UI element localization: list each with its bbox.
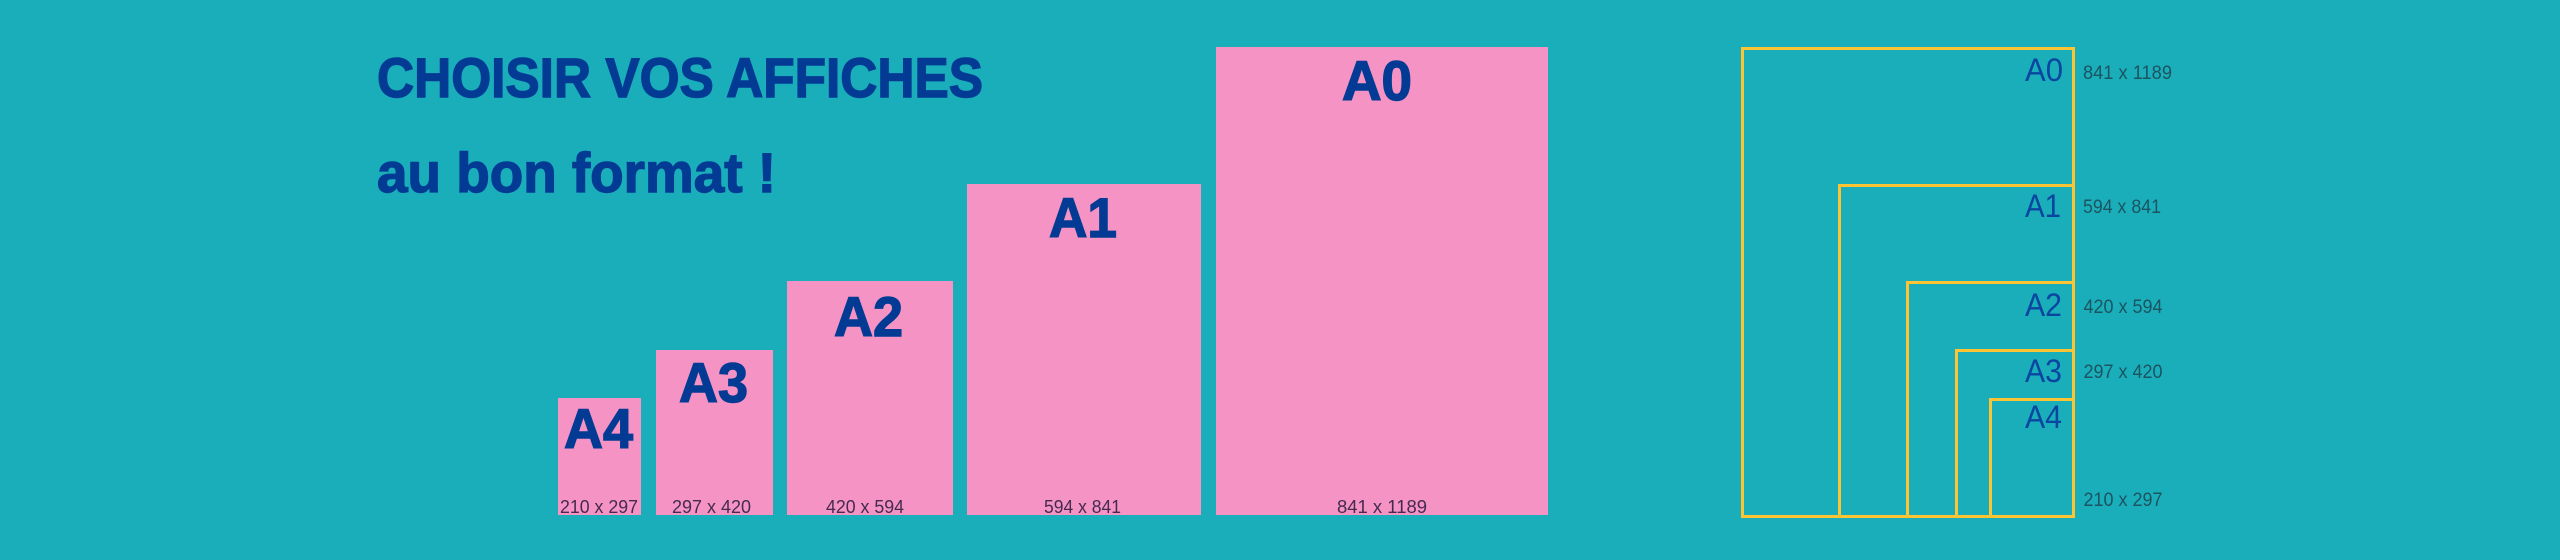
poster A2: [787, 281, 953, 517]
panel: pink poster sizes comparison: [558, 47, 1548, 517]
outline A1: 594 x 841: [2083, 197, 2161, 218]
outline A3: A3: [2025, 353, 2062, 389]
outline A0: [1742, 48, 2172, 516]
poster A0: [1216, 47, 1548, 517]
outline A1: [1840, 186, 2161, 516]
outline A0: 841 x 1189: [2083, 63, 2172, 84]
poster A0: 841 x 1189: [1337, 497, 1427, 517]
outline A1: A1: [2025, 188, 2061, 224]
poster A4: A4: [564, 397, 633, 460]
poster A4: [558, 397, 641, 517]
heading: title: [377, 46, 983, 204]
poster A4: 210 x 297: [560, 497, 638, 517]
poster A3: [656, 350, 773, 517]
poster A0: A0: [1342, 49, 1412, 112]
outline A2: [1908, 282, 2163, 516]
outline A3: 297 x 420: [2084, 362, 2162, 383]
outline A2: A2: [2025, 287, 2062, 323]
poster A3: 297 x 420: [672, 497, 751, 517]
poster A3: A3: [679, 351, 748, 414]
heading line 2: au bon format !: [377, 141, 776, 204]
outline A2: 420 x 594: [2084, 297, 2163, 318]
heading line 1: CHOISIR VOS AFFICHES: [377, 46, 983, 109]
poster A2: A2: [834, 285, 903, 348]
outline A3: [1956, 350, 2162, 516]
panel: nested format outlines: [1742, 48, 2172, 516]
outline A4: [1990, 399, 2162, 516]
poster A1: A1: [1049, 186, 1117, 249]
poster A2: 420 x 594: [826, 497, 904, 517]
outline A0: A0: [2025, 52, 2063, 88]
poster A1: 594 x 841: [1044, 497, 1121, 517]
outline A4: A4: [2025, 399, 2062, 435]
poster A1: [967, 184, 1201, 517]
outline A4: 210 x 297: [2084, 490, 2162, 511]
